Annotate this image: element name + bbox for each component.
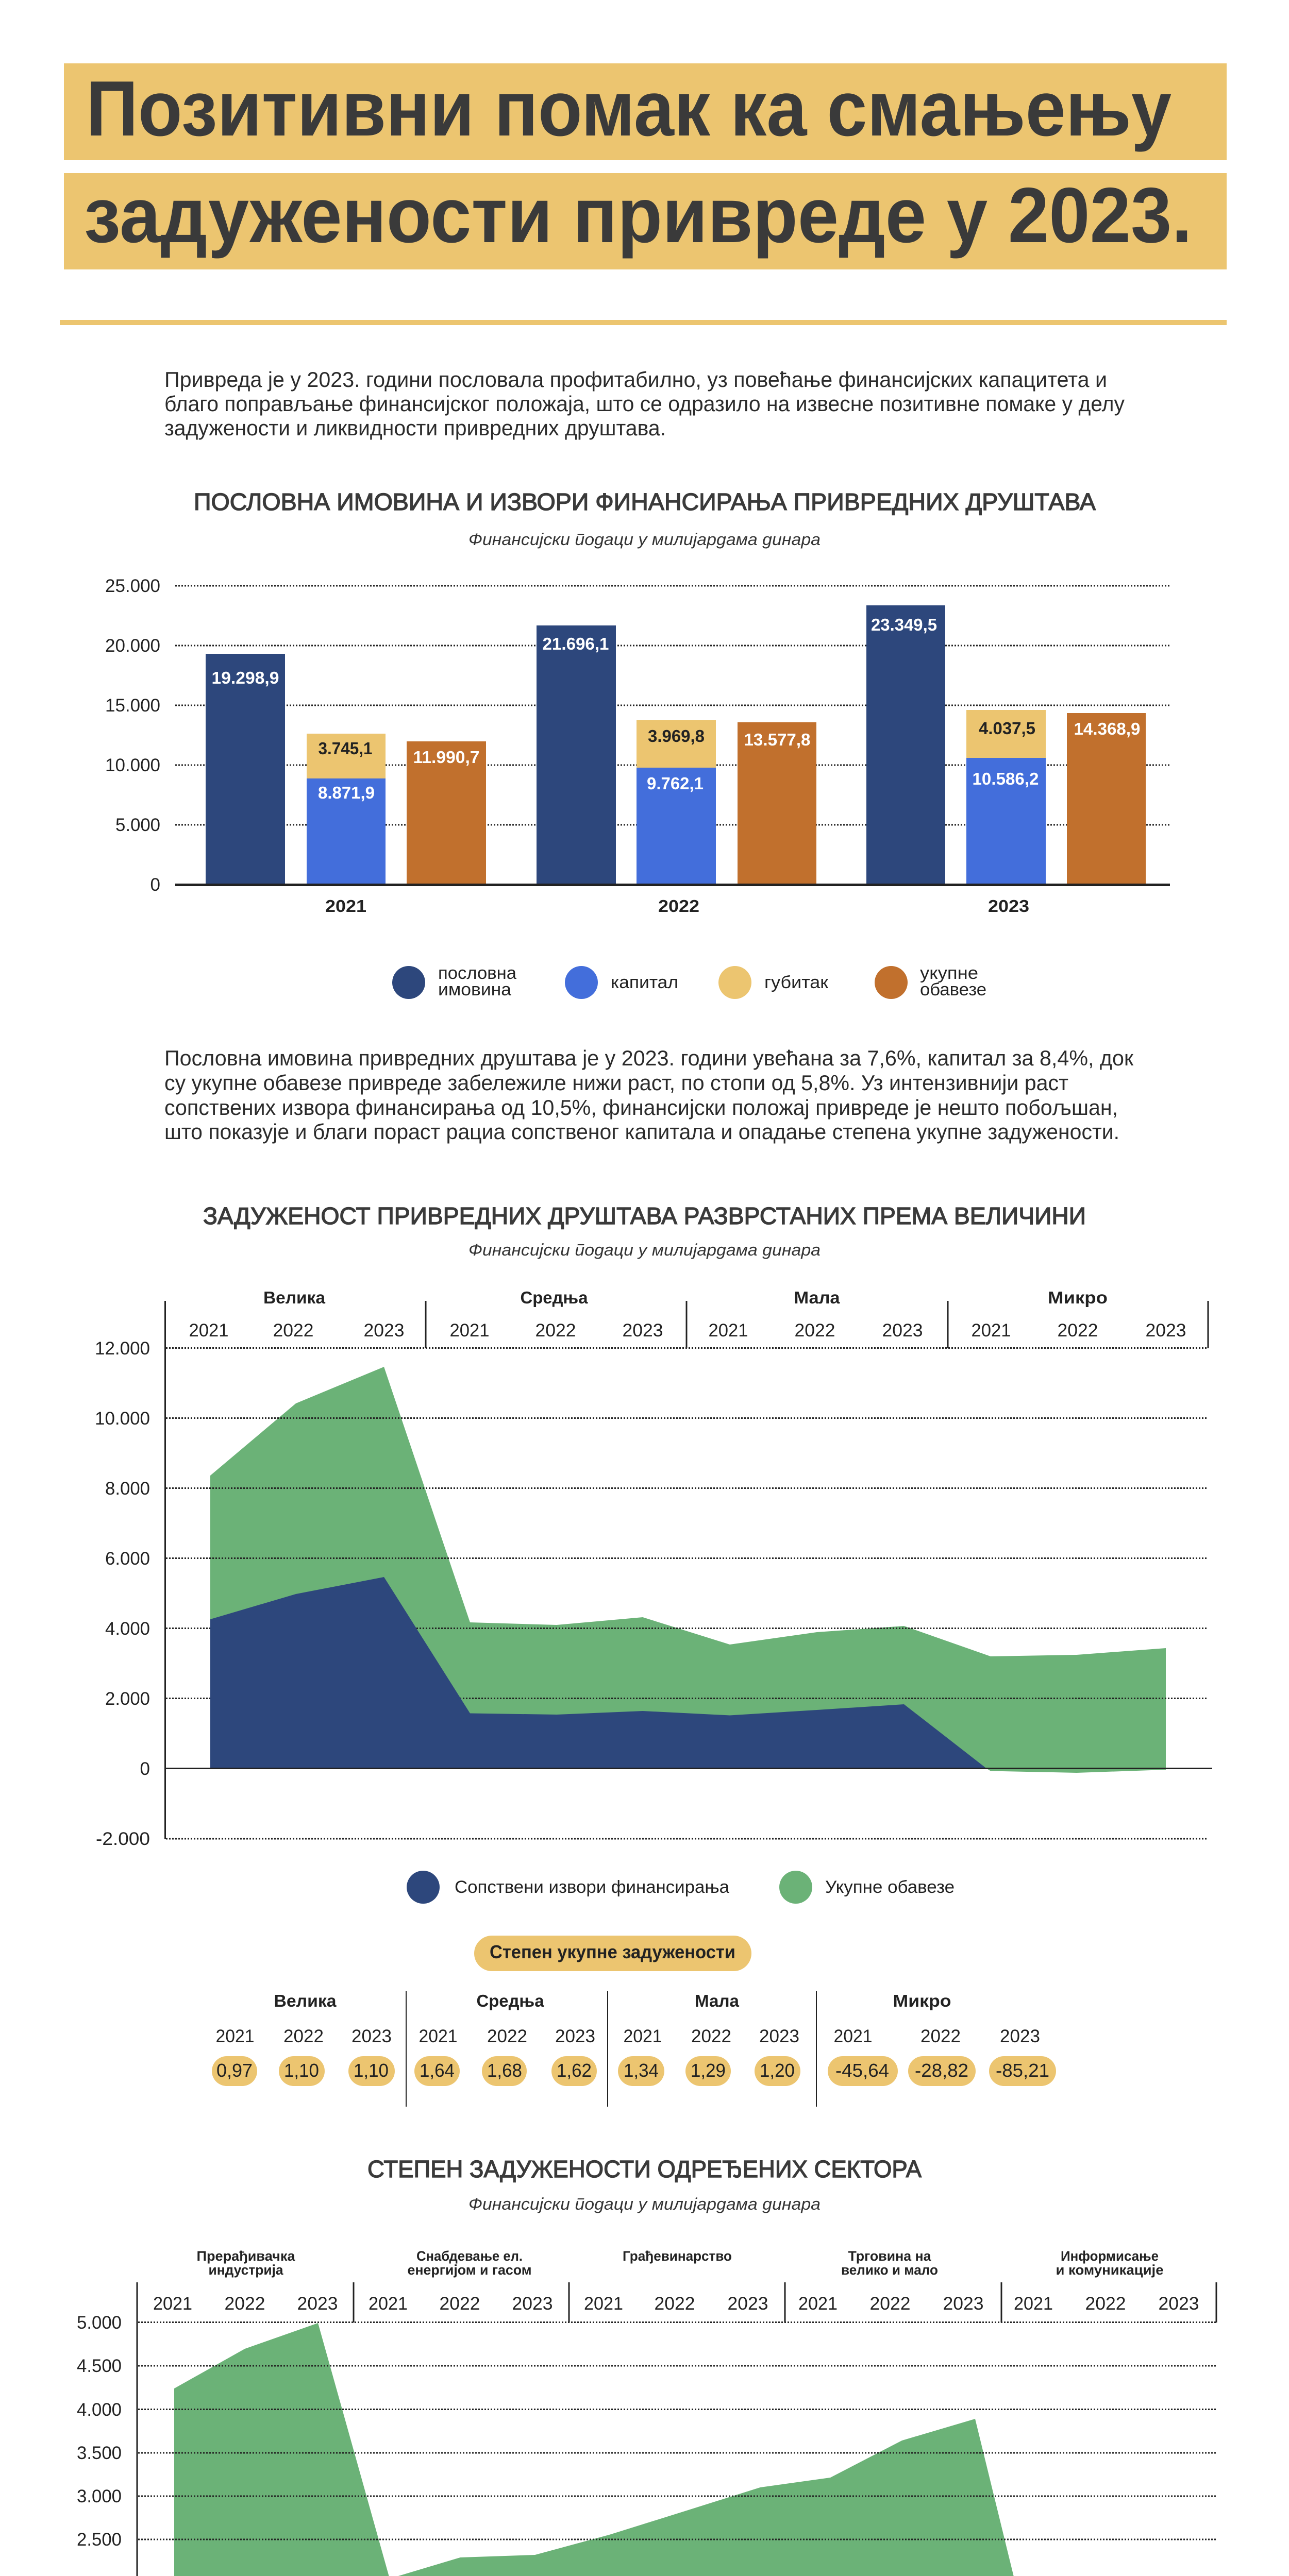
- y axis labels: 4.000: [105, 1619, 150, 1639]
- ratio pills: -85,21: [996, 2060, 1049, 2081]
- y axis labels: 3.500: [77, 2443, 122, 2463]
- bars 2021: [206, 654, 486, 885]
- total liabilities area: [210, 1367, 1166, 1773]
- year headers: 2022: [225, 2294, 265, 2314]
- title: задужености привреде у 2023.: [84, 172, 1192, 259]
- year headers: 2022: [273, 1320, 313, 1341]
- sector headers: Грађевинарство: [623, 2248, 732, 2264]
- title: Позитивни помак ка смањењу: [86, 65, 1171, 152]
- bars 2022: 13.577,8: [744, 730, 810, 749]
- legend: bar chart: обавезе: [920, 980, 986, 999]
- sector headers: Информисање: [1061, 2248, 1159, 2264]
- sector headers: индустрија: [208, 2262, 283, 2278]
- years: 2022: [691, 2026, 731, 2046]
- year headers: 2023: [623, 1320, 663, 1341]
- years: 2022: [283, 2026, 324, 2046]
- years: 2021: [834, 2026, 872, 2046]
- years: 2021: [418, 2026, 458, 2046]
- area chart: debt by size: [95, 1288, 1212, 1849]
- bars 2023: 23.349,5: [871, 615, 937, 634]
- sector headers: енергијом и гасом: [407, 2262, 532, 2278]
- bars 2022: [537, 625, 816, 885]
- ratio pills: 1,10: [354, 2060, 389, 2081]
- year headers: 2023: [882, 1320, 923, 1341]
- year headers: 2021: [369, 2294, 408, 2314]
- y axis labels: 0: [140, 1759, 150, 1779]
- y axis labels: 8.000: [105, 1479, 150, 1499]
- years: 2023: [555, 2026, 595, 2046]
- y axis labels: -2.000: [96, 1829, 150, 1849]
- intro text: задужености и ликвидности привредних друштава.: [164, 416, 666, 440]
- y axis labels: 10.000: [105, 755, 160, 775]
- years: 2022: [920, 2026, 961, 2046]
- year headers: 2022: [439, 2294, 480, 2314]
- paragraph: assets growth: сопствених извора финансирања од 10,5%, финансијски положај привреде је нешто побољшан,: [164, 1095, 1118, 1120]
- ratio pills: 1,20: [760, 2060, 795, 2081]
- group headers: Велика: [263, 1288, 326, 1307]
- legend: bar chart: пословна: [438, 963, 516, 983]
- group headers: Средња: [476, 1991, 544, 2010]
- group headers: Средња: [521, 1288, 588, 1307]
- bars 2023: 4.037,5: [979, 719, 1035, 738]
- x axis years: 2023: [988, 896, 1029, 916]
- ratio pills: 0,97: [216, 2060, 253, 2081]
- group headers: Мала: [695, 1991, 740, 2010]
- year headers: 2021: [153, 2294, 192, 2314]
- y axis labels: [105, 576, 160, 895]
- bar chart: assets and financing: [105, 576, 1170, 916]
- group headers: Мала: [794, 1288, 840, 1307]
- year headers: 2021: [449, 1320, 490, 1341]
- ratio pills: [212, 2056, 1056, 2086]
- years: 2023: [759, 2026, 799, 2046]
- legend: debt by size: Укупне обавезе: [825, 1877, 955, 1897]
- legend: bar chart: имовина: [438, 980, 511, 999]
- years: 2022: [487, 2026, 527, 2046]
- y axis labels: 4.000: [77, 2400, 122, 2420]
- year headers: 2023: [728, 2294, 768, 2314]
- x axis years: 2021: [325, 896, 366, 916]
- group headers: Микро: [1048, 1288, 1108, 1307]
- years: 2023: [351, 2026, 392, 2046]
- heading: debt by sector: СТЕПЕН ЗАДУЖЕНОСТИ ОДРЕЂЕНИХ СЕКТОРА: [367, 2156, 922, 2182]
- paragraph: assets growth: [164, 1046, 1134, 1144]
- sector headers: велико и мало: [841, 2262, 938, 2278]
- total liabilities area: [174, 2323, 1180, 2576]
- bars 2022: 3.969,8: [648, 726, 705, 745]
- intro text: Привреда је у 2023. години пословала профитабилно, уз повећање финансијских капацитета и: [164, 367, 1107, 392]
- intro text: [164, 367, 1125, 440]
- x axis years: [325, 896, 1029, 916]
- bars 2022: 9.762,1: [647, 774, 704, 793]
- year headers: 2021: [189, 1320, 229, 1341]
- ratio pills: -45,64: [835, 2060, 889, 2081]
- year headers: 2022: [795, 1320, 835, 1341]
- years: 2021: [215, 2026, 255, 2046]
- legend: debt by size: Сопствени извори финансирања: [455, 1877, 729, 1897]
- year headers: 2023: [297, 2294, 338, 2314]
- badge: total debt ratio: [474, 1936, 751, 1971]
- bars 2021: 19.298,9: [211, 668, 279, 687]
- x axis years: 2022: [658, 896, 699, 916]
- y axis labels: 5.000: [77, 2313, 122, 2333]
- y axis labels: 2.000: [105, 1689, 150, 1709]
- own capital area: [210, 1577, 986, 1768]
- heading: debt by company size: ЗАДУЖЕНОСТ ПРИВРЕДНИХ ДРУШТАВА РАЗВРСТАНИХ ПРЕМА ВЕЛИЧИНИ: [203, 1202, 1086, 1229]
- y axis labels: 5.000: [115, 815, 160, 835]
- bars 2021: 11.990,7: [413, 748, 479, 767]
- y axis labels: 20.000: [105, 636, 160, 656]
- years: 2023: [1000, 2026, 1040, 2046]
- sector headers: [197, 2248, 1164, 2278]
- year headers: 2022: [870, 2294, 910, 2314]
- subtitle: units: Финансијски подаци у милијардама динара: [468, 1241, 821, 1259]
- year headers: 2023: [512, 2294, 553, 2314]
- paragraph: assets growth: Пословна имовина привредних друштава је у 2023. години увећана за 7,6%, капитал за 8,4%, док: [164, 1046, 1134, 1070]
- year headers: 2021: [584, 2294, 623, 2314]
- year headers: 2023: [364, 1320, 404, 1341]
- year headers: 2022: [655, 2294, 695, 2314]
- year headers: 2023: [943, 2294, 983, 2314]
- ratio pills: -28,82: [915, 2060, 968, 2081]
- paragraph: assets growth: су укупне обавезе привреде забележиле нижи раст, по стопи од 5,8%. Уз интензивнији раст: [164, 1071, 1068, 1095]
- intro text: благо поправљање финансијског положаја, што се одразило на извесне позитивне помаке у делу: [164, 392, 1125, 416]
- group headers: Велика: [274, 1991, 337, 2010]
- bars 2023: [866, 605, 1146, 885]
- year headers: 2021: [1014, 2294, 1053, 2314]
- badge: total debt ratio: Степен укупне задужености: [490, 1941, 735, 1962]
- subtitle: units: Финансијски подаци у милијардама динара: [468, 2195, 821, 2213]
- year headers: [189, 1320, 1186, 1341]
- year headers: 2023: [1159, 2294, 1199, 2314]
- sector headers: Снабдевање ел.: [416, 2248, 523, 2264]
- year headers: 2021: [798, 2294, 838, 2314]
- bars 2023: 10.586,2: [972, 769, 1039, 788]
- year headers: 2021: [971, 1320, 1011, 1341]
- legend: bar chart: [392, 963, 986, 999]
- y axis labels: 4.500: [77, 2356, 122, 2376]
- year headers: 2022: [1058, 1320, 1098, 1341]
- ratio pills: 1,68: [487, 2060, 522, 2081]
- year headers: 2021: [708, 1320, 748, 1341]
- y axis labels: 12.000: [95, 1338, 150, 1359]
- table: debt ratio by size: [212, 1991, 1056, 2107]
- group headers: Микро: [893, 1991, 951, 2010]
- sector headers: и комуникације: [1056, 2262, 1164, 2278]
- ratio pills: 1,34: [624, 2060, 659, 2081]
- sector headers: Трговина на: [848, 2248, 931, 2264]
- y axis labels: 0: [150, 875, 160, 895]
- bars 2023: 14.368,9: [1074, 719, 1140, 738]
- y axis labels: 25.000: [105, 576, 160, 596]
- title: [64, 63, 1227, 269]
- ratio pills: 1,62: [557, 2060, 592, 2081]
- sector headers: Прерађивачка: [197, 2248, 295, 2264]
- y axis labels: [77, 2313, 122, 2576]
- bars 2021: 3.745,1: [319, 739, 372, 758]
- heading: assets and financing: ПОСЛОВНА ИМОВИНА И ИЗВОРИ ФИНАНСИРАЊА ПРИВРЕДНИХ ДРУШТАВА: [194, 488, 1096, 515]
- subtitle: units: Финансијски подаци у милијардама динара: [468, 530, 821, 549]
- area chart: debt by sector: [77, 2248, 1216, 2576]
- legend: bar chart: укупне: [920, 963, 978, 983]
- paragraph: assets growth: што показује и благи пораст рациа сопственог капитала и опадање степена укупне задужености.: [164, 1120, 1119, 1144]
- legend: debt by size: [407, 1871, 955, 1904]
- ratio pills: 1,29: [691, 2060, 726, 2081]
- year headers: 2023: [1145, 1320, 1186, 1341]
- y axis labels: 15.000: [105, 696, 160, 716]
- y axis labels: 2.500: [77, 2530, 122, 2550]
- y axis labels: 10.000: [95, 1409, 150, 1429]
- bars 2022: 21.696,1: [542, 634, 609, 653]
- bars 2021: 8.871,9: [318, 783, 375, 802]
- years: [215, 2026, 1040, 2046]
- year headers: 2022: [535, 1320, 576, 1341]
- y axis labels: [95, 1338, 150, 1849]
- ratio pills: 1,64: [420, 2060, 455, 2081]
- legend: bar chart: капитал: [611, 973, 678, 992]
- group headers: [263, 1288, 1108, 1307]
- ratio pills: 1,10: [284, 2060, 319, 2081]
- year headers: 2022: [1085, 2294, 1126, 2314]
- y axis labels: 6.000: [105, 1549, 150, 1569]
- y axis labels: 3.000: [77, 2486, 122, 2506]
- legend: bar chart: губитак: [764, 973, 829, 992]
- group headers: [274, 1991, 951, 2010]
- years: 2021: [624, 2026, 662, 2046]
- year headers: [153, 2294, 1199, 2314]
